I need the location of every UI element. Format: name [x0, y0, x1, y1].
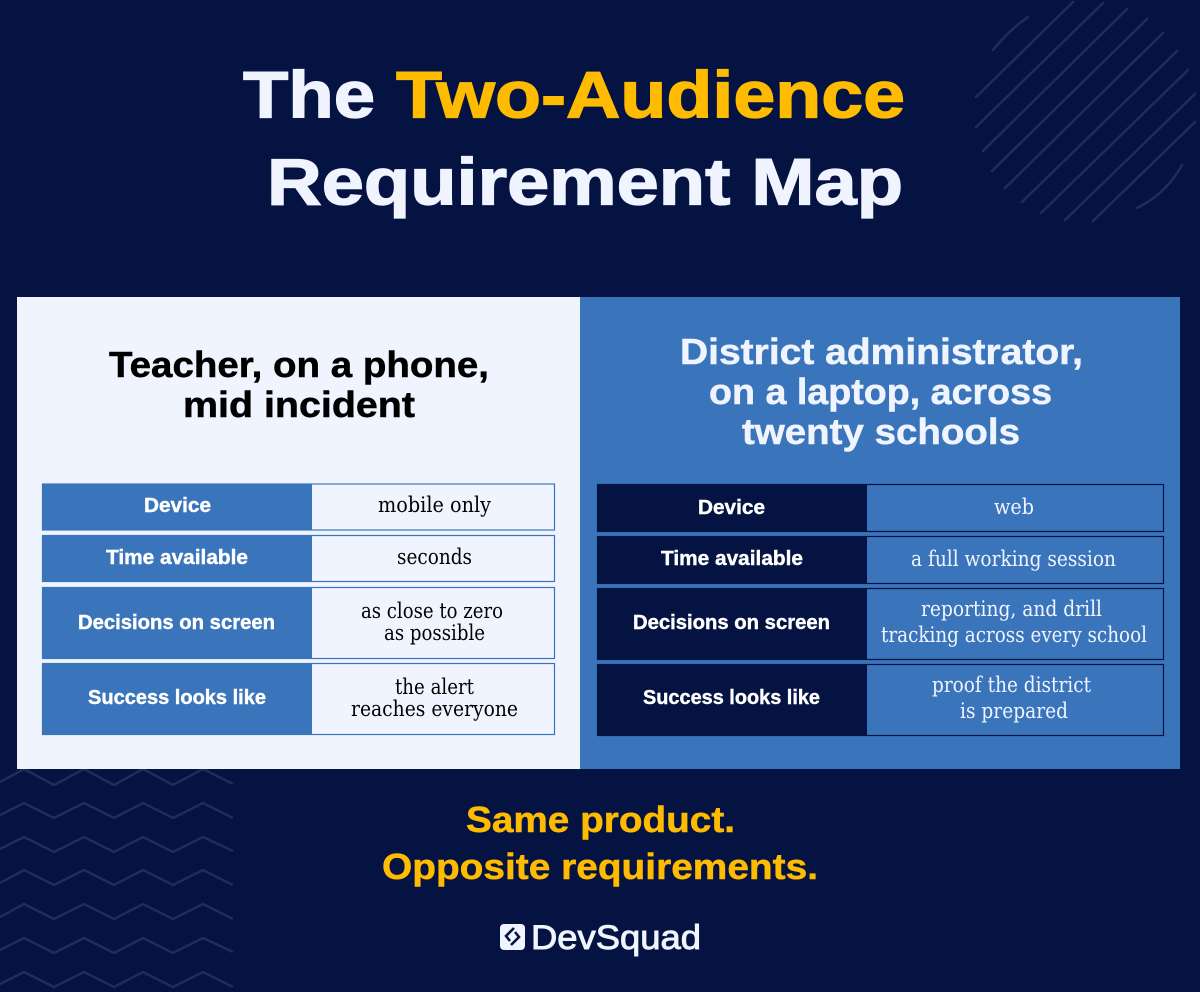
administrator row labels: Device [698, 497, 765, 519]
DevSquad logo [500, 919, 701, 957]
teacher row values [351, 493, 518, 722]
administrator row labels: Decisions on screen [633, 612, 830, 634]
teacher table [42, 484, 554, 735]
title [243, 58, 905, 218]
administrator row values: reporting, and drill [921, 597, 1102, 622]
teacher heading [109, 344, 489, 425]
administrator row values: is prepared [960, 699, 1068, 724]
closing statement: Opposite requirements. [382, 846, 818, 887]
teacher row labels [78, 495, 275, 709]
decorative zigzag lines [0, 769, 233, 987]
administrator row values: tracking across every school [881, 623, 1147, 648]
administrator row labels [633, 497, 830, 709]
teacher row values: as close to zero [361, 599, 503, 624]
icon: DevSquad mark [500, 924, 525, 950]
administrator heading: on a laptop, across [709, 371, 1052, 412]
administrator row values [881, 495, 1147, 724]
administrator heading: twenty schools [742, 411, 1020, 452]
administrator row values: web [994, 495, 1034, 520]
panel: district administrator [580, 297, 1180, 769]
administrator row values: proof the district [932, 673, 1091, 698]
administrator row labels: Success looks like [643, 687, 820, 709]
panel: teacher [17, 297, 580, 769]
teacher row labels: Decisions on screen [78, 612, 275, 634]
teacher heading: Teacher, on a phone, [109, 344, 489, 385]
administrator row labels: Time available [661, 548, 803, 570]
closing statement: Same product. [466, 799, 735, 840]
title: Two-Audience [396, 58, 905, 132]
administrator row values: a full working session [911, 547, 1116, 572]
teacher row labels: Device [144, 495, 211, 517]
administrator heading: District administrator, [680, 331, 1083, 372]
teacher row values: the alert [395, 675, 474, 700]
teacher row values: seconds [397, 545, 472, 570]
teacher row values: reaches everyone [351, 697, 518, 722]
closing statement [382, 799, 818, 887]
logo wordmark: DevSquad [531, 919, 701, 957]
title: Requirement Map [267, 144, 903, 218]
teacher row values: mobile only [378, 493, 492, 518]
administrator table [597, 484, 1164, 736]
title: The [243, 58, 375, 132]
teacher heading: mid incident [183, 384, 415, 425]
administrator heading [680, 331, 1083, 452]
teacher row labels: Time available [106, 547, 248, 569]
teacher row labels: Success looks like [88, 687, 266, 709]
teacher row values: as possible [384, 621, 485, 646]
decorative diagonal stripes [976, 2, 1195, 221]
